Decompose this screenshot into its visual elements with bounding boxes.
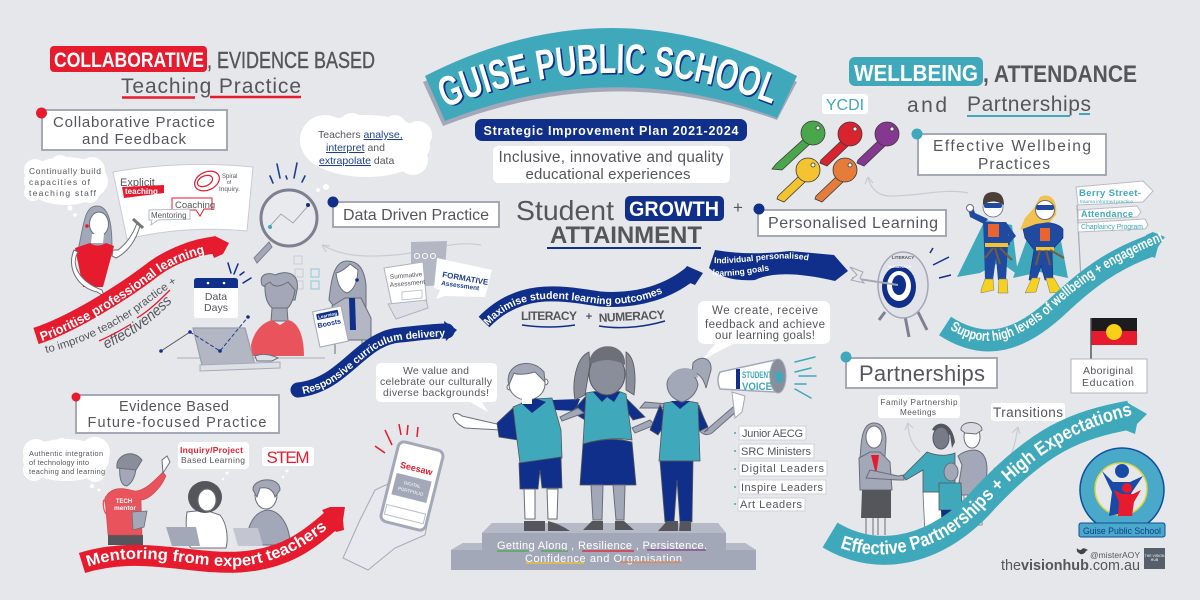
- arrow ribbon: responsive curriculum delivery: Responsive curriculum delivery: [302, 330, 445, 394]
- heading: wellbeing attendance and partnerships: [849, 57, 1137, 117]
- callout: we create receive feedback: We create, receive: [712, 305, 818, 317]
- illustration: hand holding phone with seesaw: DIGITAL: [403, 480, 422, 489]
- illustration: man at laptop: [233, 480, 290, 546]
- text: literacy and numeracy: LITERACY: [521, 309, 577, 323]
- list item: junior aecg: Junior AECG: [742, 428, 803, 440]
- list item: src ministers: SRC Ministers: [741, 446, 812, 458]
- callout: continually build capacities: teaching staff: [29, 188, 97, 198]
- credit: the vision hub: thevisionhub.com.au: [1001, 558, 1140, 574]
- arrow ribbon: support high levels of wellbeing and engagement: Support high levels of wellbeing + engagement: [951, 232, 1164, 342]
- panel: collaborative practice and feedback: [36, 108, 227, 150]
- illustration: teacher pointing at board: [71, 206, 143, 296]
- illustration: tech mentor: [103, 454, 170, 545]
- label: stem: STEM: [266, 448, 310, 467]
- subtitle: strategic improvement plan: Strategic Improvement Plan 2021-2024: [484, 124, 739, 138]
- panel: effective wellbeing practices: Practices: [978, 156, 1050, 173]
- arrow ribbon: maximise student learning outcomes: [478, 266, 703, 328]
- label: inquiry project based learning: Based Learning: [181, 455, 245, 465]
- arrow ribbon: mentoring from expert teachers: Mentoring from expert teachers: [86, 523, 326, 570]
- illustration: family and teacher handshake: [859, 422, 987, 535]
- illustration: woman with learning boosts tablet: Boosts: [317, 318, 342, 330]
- callout: we value and celebrate: [376, 363, 497, 412]
- panel: evidence based future-focused practice: Evidence Based: [119, 399, 229, 415]
- icon: summative and formative assessment bubbles: Assessment: [441, 280, 480, 292]
- heading: collaborative evidence based teaching practice: , EVIDENCE BASED: [207, 47, 375, 73]
- list item: digital leaders: Digital Leaders: [741, 463, 824, 475]
- panel: personalised learning: Personalised Learning: [768, 215, 938, 232]
- label: transitions: Transitions: [993, 405, 1063, 420]
- whiteboard: teaching strategies: Coaching: [175, 200, 215, 211]
- credit: the vision hub: @misterAOY: [1090, 550, 1140, 560]
- credit: the vision hub: THE VISION: [1145, 554, 1165, 558]
- credit: the vision hub: HUB: [1151, 558, 1159, 562]
- icon: student voice megaphone: VOICE: [742, 381, 772, 393]
- callout: teachers analyse interpret extrapolate: [300, 113, 432, 192]
- callout: we value and celebrate: celebrate our culturally: [380, 376, 493, 388]
- icon: red key: [820, 122, 862, 166]
- text: to improve teacher practice and effectiveness: effectiveness: [104, 297, 171, 348]
- signpost: berry street attendance chaplaincy: Berry Street-: [1079, 188, 1141, 199]
- panel: data driven practice: [328, 196, 499, 227]
- heading: collaborative evidence based teaching practice: Teaching Practice: [121, 75, 301, 98]
- whiteboard: teaching strategies: Explicit: [120, 177, 155, 189]
- panel: effective wellbeing practices: Effective Wellbeing: [933, 138, 1091, 155]
- icon: student voice megaphone: [718, 357, 816, 418]
- callout: teachers analyse interpret extrapolate: extrapolate data: [319, 155, 394, 167]
- callout: continually build capacities: capacities of: [29, 177, 91, 187]
- callout: continually build capacities: [24, 155, 108, 217]
- icon: student voice megaphone: STUDENT: [742, 370, 772, 380]
- panel: data driven practice: Data Driven Practice: [343, 207, 489, 224]
- illustration: woman with learning boosts tablet: [313, 261, 371, 354]
- list item: inspire leaders: Inspire Leaders: [741, 482, 824, 494]
- panel: aboriginal education: Education: [1082, 377, 1134, 389]
- label: family partnership meetings: Family Partnership: [880, 398, 958, 407]
- illustration: podium: Getting Along , Resilience , Persistence,: [497, 540, 707, 552]
- illustration: podium: [451, 523, 756, 570]
- illustration: hand holding phone with seesaw: Seesaw: [399, 460, 435, 478]
- panel: collaborative practice and feedback: Collaborative Practice: [53, 114, 215, 131]
- icon: target with arrow: NUMERACY: [888, 264, 912, 269]
- credit: the vision hub: [1001, 548, 1165, 574]
- heading: wellbeing attendance and partnerships: WELLBEING: [854, 60, 978, 86]
- illustration: superhero boy: [957, 192, 1018, 293]
- icon: summative and formative assessment bubbles: Assessment: [390, 279, 426, 289]
- icon: data days calendar: Data: [205, 291, 227, 303]
- callout: we create receive feedback: our learning goals!: [715, 330, 815, 342]
- whiteboard: teaching strategies: [113, 164, 253, 239]
- heading: student growth and attainment: GROWTH: [629, 198, 719, 221]
- panel: evidence based future-focused practice: [72, 392, 279, 433]
- panel: aboriginal education: [1071, 359, 1147, 393]
- list: student leadership groups: [734, 426, 827, 511]
- illustration: student girl right with megaphone: [632, 358, 737, 531]
- icons: coloured keys: [772, 121, 899, 202]
- illustration: superhero girl: [1013, 196, 1068, 293]
- callout: we create receive feedback: [698, 301, 830, 360]
- callout: authentic integration of technology: of technology into: [29, 458, 89, 467]
- arrow: heroes to keys: [865, 177, 968, 196]
- callout: we create receive feedback: feedback and achieve: [705, 319, 825, 331]
- icon: magnifying glass with line chart: [254, 163, 317, 263]
- text block: inclusive innovative and quality: Inclusive, innovative and quality: [498, 149, 724, 166]
- panel: effective wellbeing practices: [912, 128, 1106, 175]
- callout: authentic integration of technology: teaching and learning: [29, 467, 105, 476]
- arrow ribbon: individual personalised learning goals: learning goals: [712, 265, 769, 276]
- icon: summative and formative assessment bubbles: Summative: [390, 271, 423, 281]
- panel: aboriginal education: Aboriginal: [1083, 365, 1133, 377]
- callout: continually build capacities: Continually build: [29, 166, 101, 176]
- illustration: student girl middle: [560, 346, 668, 530]
- panel: evidence based future-focused practice: Future-focused Practice: [88, 415, 266, 431]
- callout: we value and celebrate: We value and: [403, 365, 469, 377]
- panel: personalised learning: [754, 204, 946, 236]
- signpost: berry street attendance chaplaincy: Attendance: [1081, 209, 1133, 219]
- heading: student growth and attainment: Student: [516, 195, 614, 226]
- arrow ribbon: individual personalised learning goals: [709, 250, 848, 281]
- heading: student growth and attainment: +: [733, 198, 743, 217]
- signpost: berry street attendance chaplaincy: trauma informed practice: [1080, 199, 1133, 205]
- illustration: hand holding phone with seesaw: [343, 424, 444, 570]
- whiteboard: teaching strategies: Inquiry.: [219, 186, 240, 193]
- illustration: tech mentor: TECH: [116, 499, 132, 505]
- illustration: hand holding phone with seesaw: PORTFOLIO: [397, 486, 424, 497]
- logo: guise public school: Guise Public School: [1083, 526, 1161, 537]
- panel: partnerships: [840, 352, 997, 388]
- callout: we value and celebrate: diverse backgrounds!: [383, 387, 489, 399]
- icon: orange key: [815, 158, 857, 202]
- signpost: berry street attendance chaplaincy: [1076, 181, 1153, 280]
- heading: wellbeing attendance and partnerships: Partnerships: [967, 93, 1091, 116]
- icon: target with arrow: [850, 248, 951, 337]
- label: stem: [262, 447, 314, 478]
- heading: student growth and attainment: ATTAINMENT: [550, 222, 702, 249]
- whiteboard: teaching strategies: of: [227, 180, 232, 186]
- label: inquiry project based learning: [178, 442, 249, 480]
- icon: summative and formative assessment bubbles: FORMATIVE: [442, 270, 490, 287]
- subtitle: strategic improvement plan: [475, 119, 747, 141]
- arrow ribbon: effective partnerships and high expectations: Effective Partnerships + High Expectations: [840, 406, 1132, 555]
- heading: wellbeing attendance and partnerships: , ATTENDANCE: [983, 61, 1137, 88]
- icon: yellow key: [777, 158, 820, 202]
- arrow ribbon: individual personalised learning goals: Individual personalised: [714, 252, 809, 264]
- callout: teachers analyse interpret extrapolate: Teachers analyse,: [318, 129, 403, 141]
- title banner: guise public school: GUISE PUBLIC SCHOOL: [443, 46, 774, 106]
- text: literacy and numeracy: +: [586, 311, 592, 323]
- illustration: woman with learning boosts tablet: Learning: [318, 311, 338, 320]
- illustration: student boy: [453, 363, 580, 531]
- callout: authentic integration of technology: [23, 437, 110, 492]
- heading: student growth and attainment: [516, 195, 743, 249]
- arrow ribbon: maximise student learning outcomes: Maximise student learning outcomes: [483, 288, 662, 326]
- whiteboard: teaching strategies: teaching: [125, 187, 158, 196]
- icon: purple key: [857, 122, 899, 166]
- decorative squares: [294, 256, 319, 289]
- callout: teachers analyse interpret extrapolate: interpret and: [326, 142, 385, 154]
- text: literacy and numeracy: NUMERACY: [598, 308, 665, 325]
- illustration: podium: Confidence and Organisation: [525, 553, 682, 565]
- arrows: family to labels: [905, 423, 1020, 468]
- panel: partnerships: Partnerships: [859, 361, 985, 386]
- icon: data days calendar: [194, 263, 251, 318]
- text: literacy and numeracy: [521, 308, 665, 328]
- heading: collaborative evidence based teaching practice: COLLABORATIVE: [54, 49, 204, 72]
- label: inquiry project based learning: Inquiry/Project: [180, 445, 243, 455]
- label: family partnership meetings: Meetings: [900, 408, 936, 417]
- illustration: woman at laptop: [166, 481, 227, 548]
- text block: inclusive innovative and quality: [493, 146, 730, 183]
- icon: green key: [772, 121, 825, 170]
- callout: authentic integration of technology: Authentic integration: [29, 449, 103, 458]
- icon: data days calendar: Days: [204, 302, 228, 314]
- heading: collaborative evidence based teaching practice: [50, 46, 375, 98]
- icon: target with arrow: LITERACY: [892, 255, 914, 260]
- icon: summative and formative assessment bubbles: [384, 241, 492, 319]
- whiteboard: teaching strategies: Spiral: [222, 174, 237, 180]
- flag: aboriginal flag: [1091, 318, 1137, 360]
- logo: guise public school: [1079, 448, 1165, 537]
- label: ycdi: YCDI: [826, 97, 864, 114]
- text block: inclusive innovative and quality: educational experiences: [526, 166, 690, 183]
- title banner: guise public school: GUISE PUBLIC SCHOOL: [438, 44, 774, 105]
- arrow: assessment back to magnifier: [322, 244, 481, 256]
- text: to improve teacher practice and effectiveness: to improve teacher practice +: [44, 278, 175, 353]
- whiteboard: teaching strategies: Mentoring: [151, 211, 187, 220]
- signpost: berry street attendance chaplaincy: Chaplaincy Program: [1081, 224, 1143, 231]
- illustration: man at laptop with data: [159, 273, 325, 371]
- panel: collaborative practice and feedback: and Feedback: [82, 131, 186, 148]
- label: family partnership meetings: [878, 395, 960, 418]
- list item: art leaders: Art Leaders: [740, 499, 802, 511]
- heading: wellbeing attendance and partnerships: and: [907, 94, 947, 117]
- illustration: tech mentor: mentor: [114, 505, 136, 512]
- arrow ribbon: prioritise professional learning: Prioritise professional learning: [40, 246, 204, 341]
